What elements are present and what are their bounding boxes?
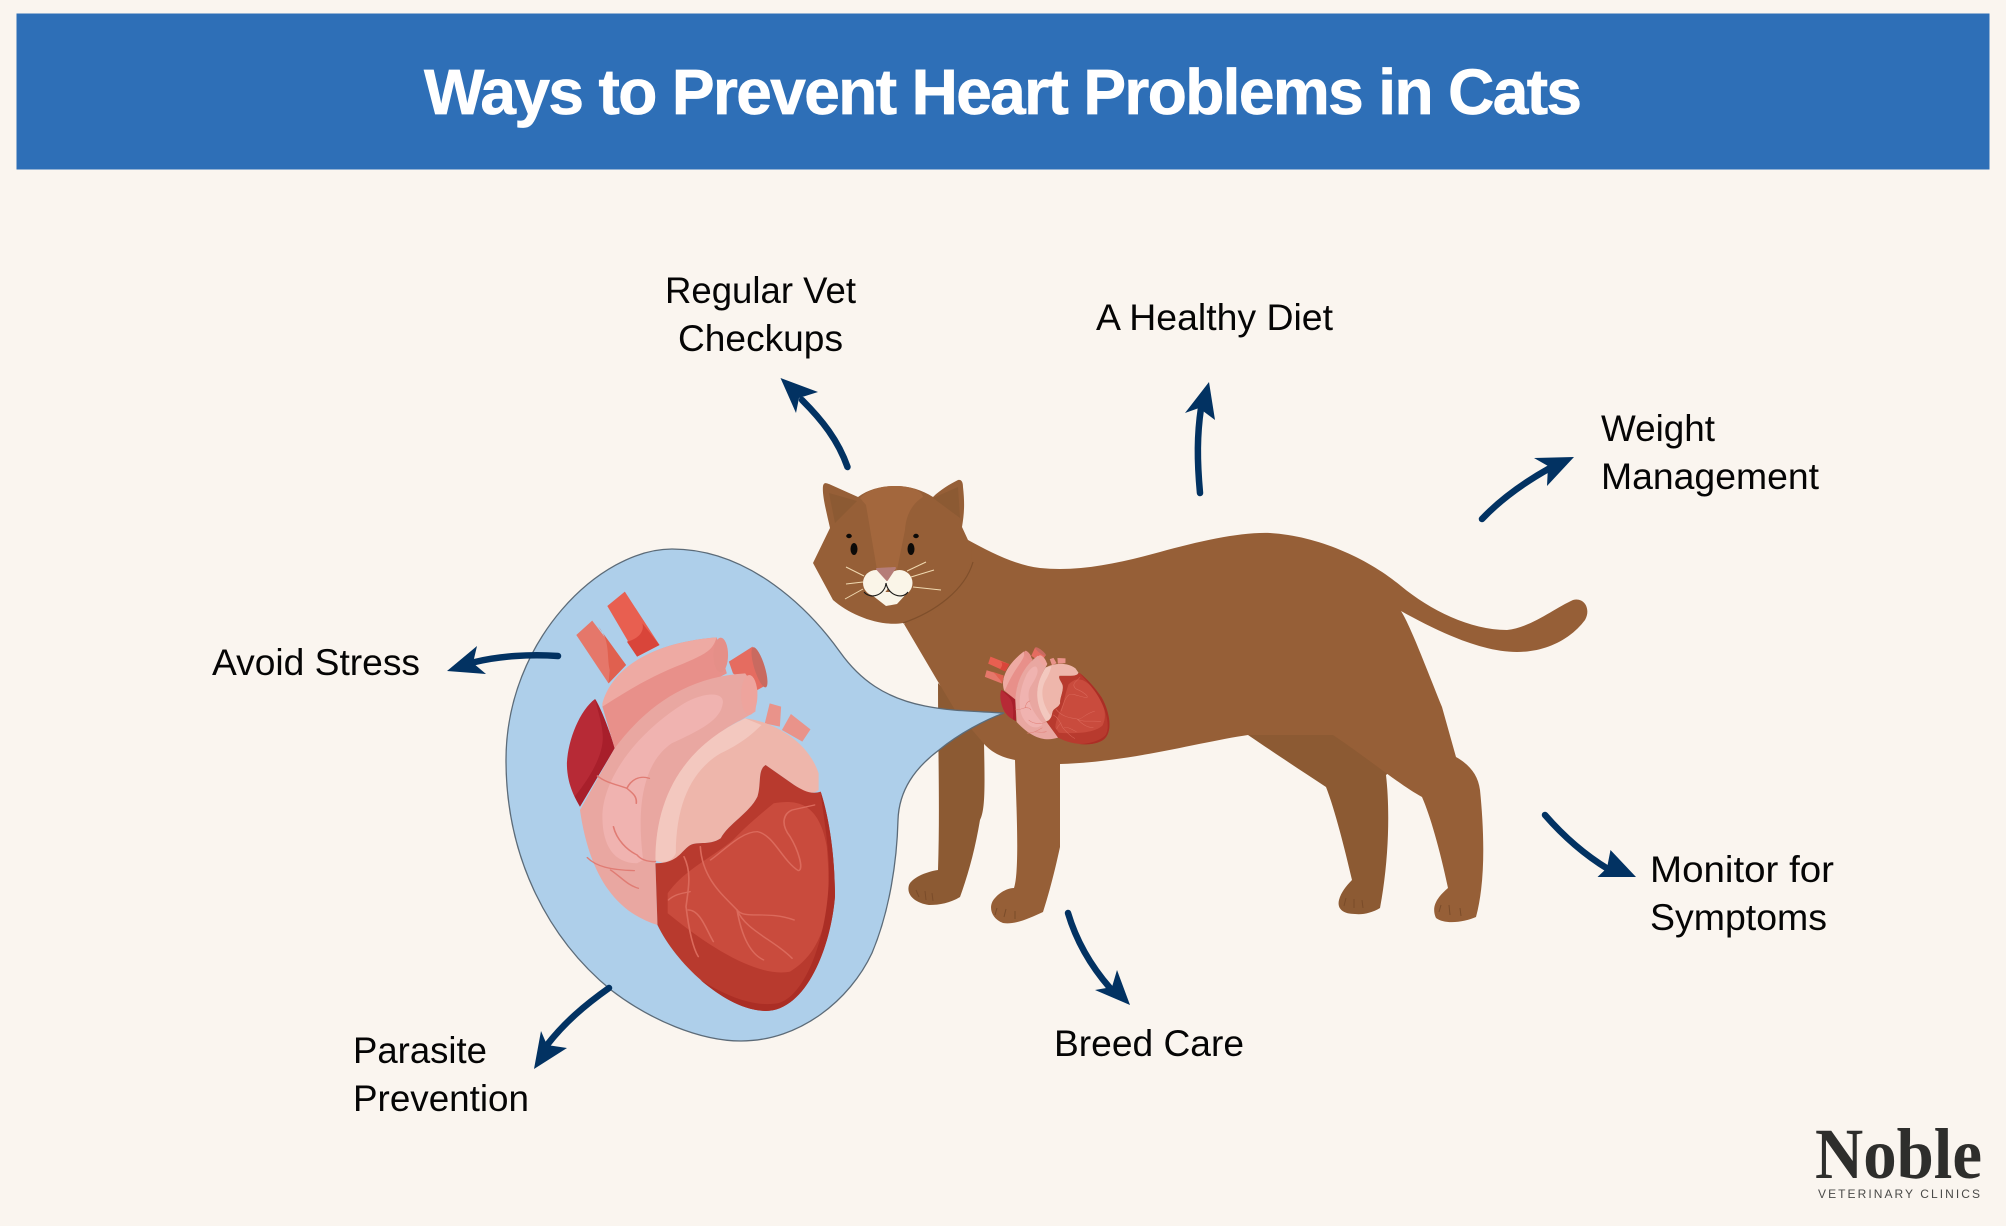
arrow: regular vet checkups xyxy=(780,378,848,467)
label: regular vet checkups: Checkups xyxy=(678,318,843,359)
cat illustration xyxy=(813,480,1587,923)
title: Ways to Prevent Heart Problems in Cats xyxy=(424,56,1582,128)
label: weight management xyxy=(1601,408,1820,497)
title banner xyxy=(16,14,1990,170)
label: a healthy diet: A Healthy Diet xyxy=(1096,297,1334,338)
arrow: parasite prevention xyxy=(534,988,609,1069)
enlarged heart xyxy=(567,592,835,1011)
label: weight management: Management xyxy=(1601,456,1820,497)
paw toes xyxy=(916,890,1461,919)
cat muzzle xyxy=(863,568,912,606)
heart vessels xyxy=(576,592,810,742)
heart ventricle xyxy=(655,765,835,1011)
label: monitor for symptoms xyxy=(1650,849,1834,938)
heart aorta and right side xyxy=(580,673,757,925)
small heart on cat xyxy=(975,618,1122,777)
cat whiskers xyxy=(845,562,941,599)
label: regular vet checkups xyxy=(665,270,857,359)
arrow: a healthy diet xyxy=(1185,382,1215,493)
label: monitor for symptoms: Monitor for xyxy=(1650,849,1834,890)
label: monitor for symptoms: Symptoms xyxy=(1650,897,1827,938)
cat body and tail xyxy=(904,533,1587,923)
label: avoid stress: Avoid Stress xyxy=(212,642,420,683)
label: breed care: Breed Care xyxy=(1054,1023,1244,1064)
zoom bubble with enlarged heart xyxy=(506,549,1004,1041)
heart upper atrium xyxy=(602,637,727,748)
cat eyes xyxy=(846,534,919,555)
far front leg xyxy=(908,683,985,905)
label: parasite prevention: Parasite xyxy=(353,1030,487,1071)
arrow: breed care xyxy=(1068,913,1130,1005)
heart left dark chamber xyxy=(567,699,615,807)
heart left atrium xyxy=(655,718,819,863)
arrow: weight management xyxy=(1482,457,1574,519)
heart veins xyxy=(587,776,815,960)
bubble shape xyxy=(506,549,1004,1041)
logo subtitle: VETERINARY CLINICS xyxy=(1818,1187,1980,1201)
label: weight management: Weight xyxy=(1601,408,1716,449)
arrow: monitor for symptoms xyxy=(1545,815,1636,877)
far hind leg xyxy=(1248,715,1395,914)
label: parasite prevention xyxy=(353,1030,529,1119)
cat head xyxy=(813,480,973,624)
chin crease xyxy=(903,562,973,623)
label: parasite prevention: Prevention xyxy=(353,1078,529,1119)
label: regular vet checkups: Regular Vet xyxy=(665,270,857,311)
arrow: avoid stress xyxy=(447,646,558,674)
logo: Noble Veterinary Clinics: Noble xyxy=(1815,1114,1982,1194)
